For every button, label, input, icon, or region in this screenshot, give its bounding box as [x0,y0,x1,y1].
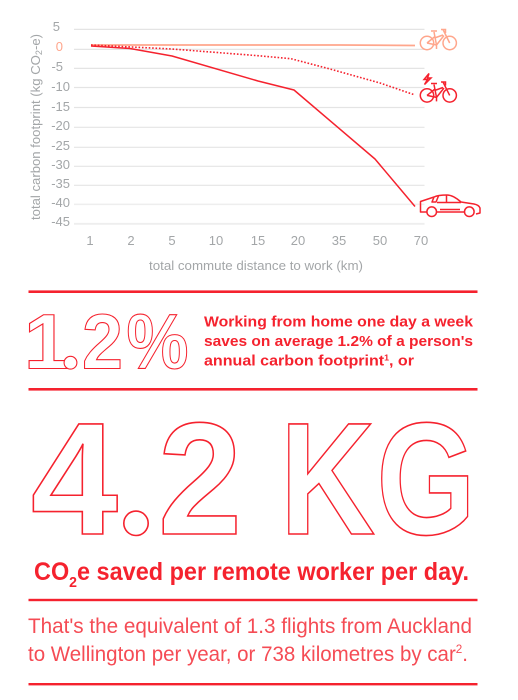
divider [28,290,478,293]
x axis labels: 50 [373,233,387,248]
big stat: 4.2 KG: . [128,478,145,545]
equivalence text: 2 [456,642,463,656]
y axis labels: -10 [51,79,70,94]
big stat: 1.2%: 2 [82,298,123,386]
equivalence text: to Wellington per year, or 738 kilometres by car [28,643,466,666]
y axis labels: 5 [53,19,60,34]
x axis labels: 1 [86,233,94,248]
icon: e-bike [420,74,456,102]
x axis labels: 20 [291,233,305,248]
stat description: saves on average 1.2% of a person's [204,334,473,350]
equivalence text: That's the equivalent of 1.3 flights from Auckland [28,615,472,638]
y axis labels: -35 [51,176,70,191]
divider [28,388,478,391]
stat description: 1 [384,354,390,362]
y axis labels: -25 [51,138,70,153]
y axis labels: -30 [51,157,70,172]
stat description: Working from home one day a week [204,314,474,330]
x axis labels: 35 [332,233,346,248]
x axis labels: 10 [209,233,223,248]
x axis labels: 70 [414,233,428,248]
big stat: 1.2%: . [64,343,72,376]
big stat: 1.2%: 1 [24,298,69,386]
big stat: 4.2 KG: G [376,389,476,568]
big stat: 4.2 KG [31,389,476,568]
line: car [91,46,415,206]
stat description [204,314,474,370]
y axis title: -e) [28,34,43,50]
big stat: 4.2 KG: 2 [158,389,242,568]
big stat: 4.2 KG: K [280,389,375,568]
subheading: e saved per remote worker per day. [77,558,469,586]
icon: car [420,195,480,216]
x axis labels: 5 [168,233,176,248]
y axis labels: 0 [56,39,63,54]
x axis labels: 2 [127,233,135,248]
equivalence text: . [462,643,468,666]
line: e-bike [91,45,415,95]
x axis labels: 15 [251,233,265,248]
y axis labels: -15 [51,99,70,114]
stat description: annual carbon footprint [204,354,367,370]
y axis labels: -20 [51,118,70,133]
stat description: , or [389,354,414,370]
divider [28,599,478,601]
x axis labels [86,233,428,248]
equivalence text [28,615,472,666]
big stat: 4.2 KG: 4 [31,389,118,568]
line: bicycle [91,44,415,46]
subheading: CO [34,558,72,586]
big stat: 1.2%: % [126,298,188,386]
big stat: 1.2% [24,298,188,386]
subheading: 2 [69,574,77,591]
divider [28,683,478,685]
y axis labels: -5 [51,59,63,74]
y axis labels: -40 [51,195,70,210]
y axis title: total carbon footprint (kg CO [28,57,43,220]
y axis labels [51,19,70,229]
y axis labels: -45 [51,214,70,229]
x axis title: total commute distance to work (km) [149,258,363,273]
icon: bicycle [420,30,456,50]
y axis title: 2 [34,50,44,55]
